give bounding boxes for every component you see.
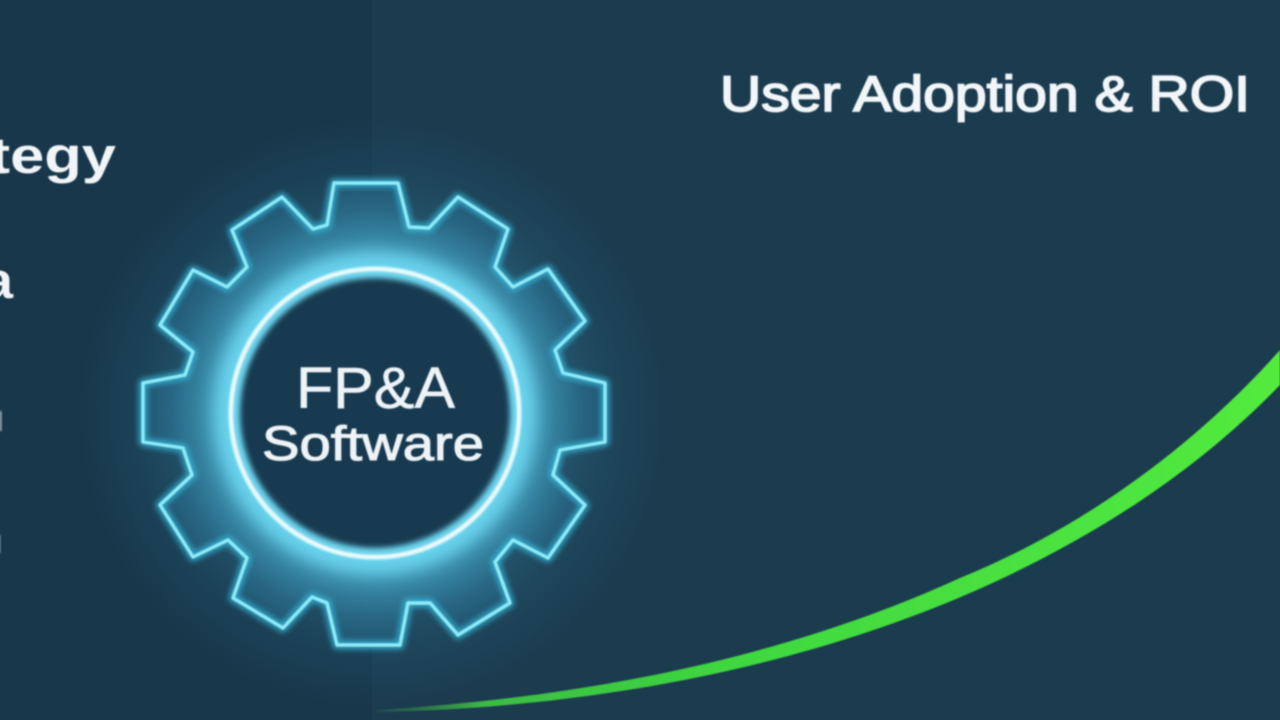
inner hub (232, 270, 518, 556)
ring wide glow (227, 265, 523, 561)
label: Software: Software (262, 418, 484, 471)
green growth curve (376, 350, 1280, 712)
label: FP&A: FP&A (296, 356, 455, 421)
left clipped labels (0, 127, 117, 553)
clipped label sliver lower (0, 535, 1, 553)
clipped label sliver (0, 411, 2, 431)
gear outline (143, 183, 605, 645)
ring inner glow (235, 273, 515, 553)
gear outline glow (143, 183, 605, 645)
heading: User Adoption & ROI: User Adoption & ROI (720, 66, 1250, 122)
gear label (262, 356, 484, 471)
gear body (143, 183, 605, 645)
ring (231, 269, 519, 557)
gear icon (143, 183, 605, 645)
left darker panel (0, 0, 372, 720)
gear halo glow (79, 118, 669, 708)
